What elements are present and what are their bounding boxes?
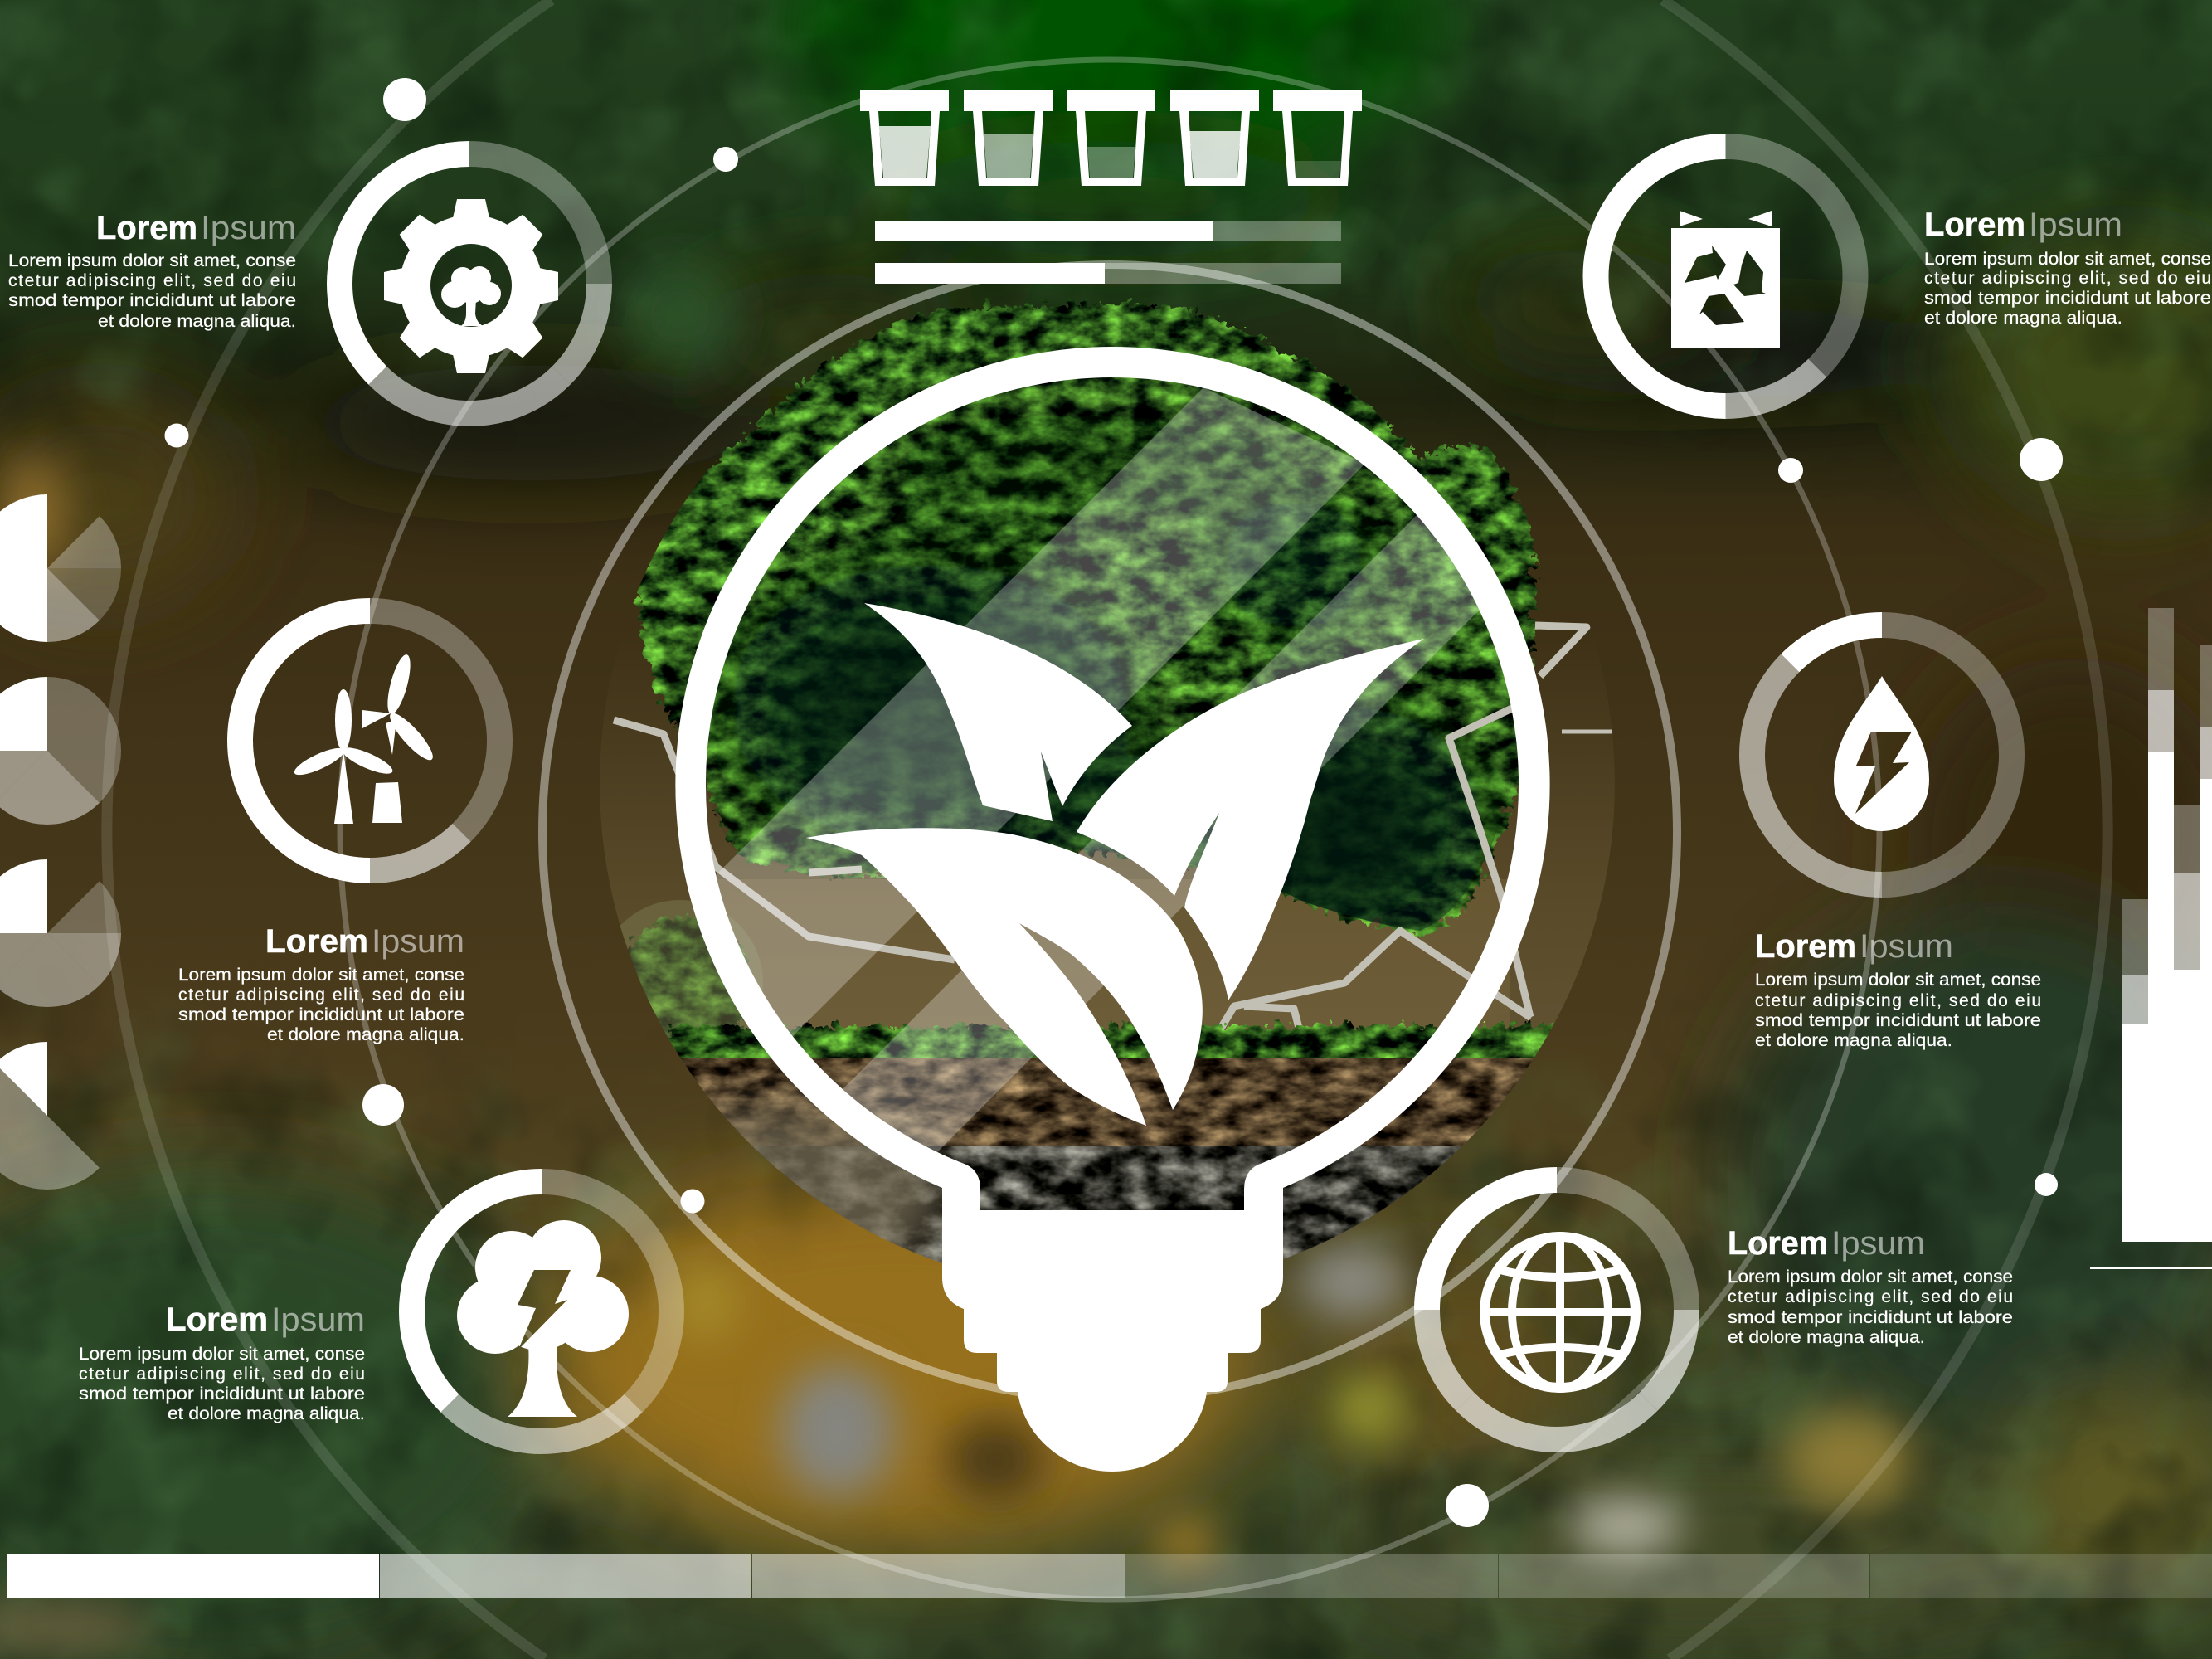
soil bbox=[581, 1058, 1659, 1150]
donut: energy drop bbox=[1725, 625, 2039, 912]
text: recycling: Ipsum bbox=[2029, 207, 2122, 243]
text: recycling: et dolore magna aliqua. bbox=[1924, 309, 2122, 328]
inner orbit ring bbox=[542, 265, 1677, 1399]
text: wind: ctetur adipiscing elit, sed do eiu bbox=[178, 985, 464, 1005]
donut: wind bbox=[241, 611, 527, 898]
tree canopy bbox=[634, 299, 1532, 931]
icon: wind turbines bbox=[291, 653, 438, 824]
icon: recycling bin bbox=[1671, 211, 1780, 348]
cup 5 bbox=[1273, 90, 1362, 186]
pie 2 bbox=[0, 677, 136, 839]
text: energy drop: ctetur adipiscing elit, sed do eiu bbox=[1755, 991, 2041, 1010]
text: gear: smod tempor incididunt ut labore bbox=[8, 291, 296, 310]
branches bbox=[614, 625, 1616, 1064]
text: globe: Ipsum bbox=[1831, 1225, 1925, 1262]
text: tree: Lorem bbox=[166, 1301, 268, 1338]
middle orbit ring bbox=[340, 60, 1879, 1599]
text: gear: Ipsum bbox=[201, 210, 296, 246]
text: wind: smod tempor incididunt ut labore bbox=[178, 1005, 464, 1024]
cup 4 bbox=[1170, 90, 1259, 186]
text: globe: et dolore magna aliqua. bbox=[1728, 1328, 1925, 1347]
grass bbox=[664, 1022, 1601, 1063]
text: gear: Lorem ipsum dolor sit amet, conse bbox=[8, 251, 296, 270]
text: globe bbox=[1728, 1225, 2013, 1347]
text: tree bbox=[79, 1301, 365, 1423]
text: recycling: smod tempor incididunt ut labore bbox=[1924, 289, 2211, 308]
text: energy drop: et dolore magna aliqua. bbox=[1755, 1031, 1952, 1050]
text: tree: et dolore magna aliqua. bbox=[168, 1404, 365, 1423]
light bulb outline bbox=[675, 347, 1550, 1472]
pie 4 bbox=[0, 1027, 100, 1204]
progress bars bbox=[875, 221, 1341, 284]
text: energy drop: smod tempor incididunt ut labore bbox=[1755, 1011, 2041, 1030]
text: recycling: Lorem bbox=[1924, 207, 2025, 243]
text: recycling bbox=[1924, 207, 2211, 328]
text: wind: Lorem ipsum dolor sit amet, conse bbox=[178, 966, 464, 985]
bottom segmented bar bbox=[7, 1554, 2212, 1598]
text: energy drop: Lorem ipsum dolor sit amet, conse bbox=[1755, 971, 2041, 990]
grass patch left bbox=[614, 912, 746, 1053]
cup 2 bbox=[964, 90, 1053, 186]
leaf: right bbox=[1077, 639, 1424, 1000]
text: wind: Ipsum bbox=[372, 923, 464, 960]
text: recycling: ctetur adipiscing elit, sed do eiu bbox=[1924, 269, 2211, 288]
grass haze bbox=[597, 900, 763, 1066]
text: wind bbox=[178, 923, 464, 1044]
leaf: lower big bbox=[806, 828, 1203, 1126]
text: wind: Lorem bbox=[265, 923, 368, 960]
rock tint left bbox=[630, 1103, 946, 1286]
cups chart bbox=[860, 90, 1362, 186]
pie 1 bbox=[0, 494, 136, 657]
bulb glass reflections bbox=[419, 387, 1575, 1260]
text: energy drop: Lorem bbox=[1755, 928, 1856, 965]
text: globe: ctetur adipiscing elit, sed do eiu bbox=[1728, 1287, 2013, 1306]
text: globe: smod tempor incididunt ut labore bbox=[1728, 1308, 2013, 1327]
icon: globe bbox=[1484, 1236, 1636, 1389]
stacked bar chart right bbox=[2090, 608, 2212, 1269]
donut: tree bbox=[412, 1181, 698, 1468]
icon: gear with tree bbox=[365, 182, 581, 390]
text: tree: Lorem ipsum dolor sit amet, conse bbox=[79, 1345, 365, 1364]
icon: tree with bolt bbox=[440, 1211, 647, 1427]
cup 1 bbox=[860, 90, 949, 186]
text: gear: Lorem bbox=[96, 210, 197, 246]
cup 3 bbox=[1067, 90, 1155, 186]
text: gear bbox=[8, 210, 296, 331]
icon: energy drop bbox=[1834, 676, 1929, 831]
leaf: upper left bbox=[864, 603, 1132, 821]
leaf logo bbox=[806, 603, 1424, 1126]
canopy shading bbox=[730, 415, 1485, 954]
text: tree: ctetur adipiscing elit, sed do eiu bbox=[79, 1365, 365, 1384]
text: globe: Lorem bbox=[1728, 1225, 1828, 1262]
glass globe with tree and soil bbox=[600, 295, 1615, 1263]
donut: recycling bbox=[1596, 146, 1882, 433]
lower rock bbox=[581, 1146, 1659, 1303]
donut: gear bbox=[340, 154, 626, 440]
node dots bbox=[164, 78, 2063, 1527]
text: tree: Ipsum bbox=[271, 1301, 365, 1338]
text: gear: ctetur adipiscing elit, sed do eiu bbox=[8, 271, 296, 290]
text: energy drop bbox=[1755, 928, 2041, 1050]
text: gear: et dolore magna aliqua. bbox=[98, 312, 296, 331]
text: globe: Lorem ipsum dolor sit amet, conse bbox=[1728, 1267, 2013, 1287]
text: tree: smod tempor incididunt ut labore bbox=[79, 1384, 365, 1404]
text: energy drop: Ipsum bbox=[1860, 928, 1953, 965]
donut: globe bbox=[1400, 1180, 1714, 1467]
pie 3 bbox=[0, 859, 136, 1022]
text: recycling: Lorem ipsum dolor sit amet, conse bbox=[1924, 250, 2211, 269]
pie charts left bbox=[0, 494, 136, 1204]
text: wind: et dolore magna aliqua. bbox=[267, 1025, 464, 1044]
